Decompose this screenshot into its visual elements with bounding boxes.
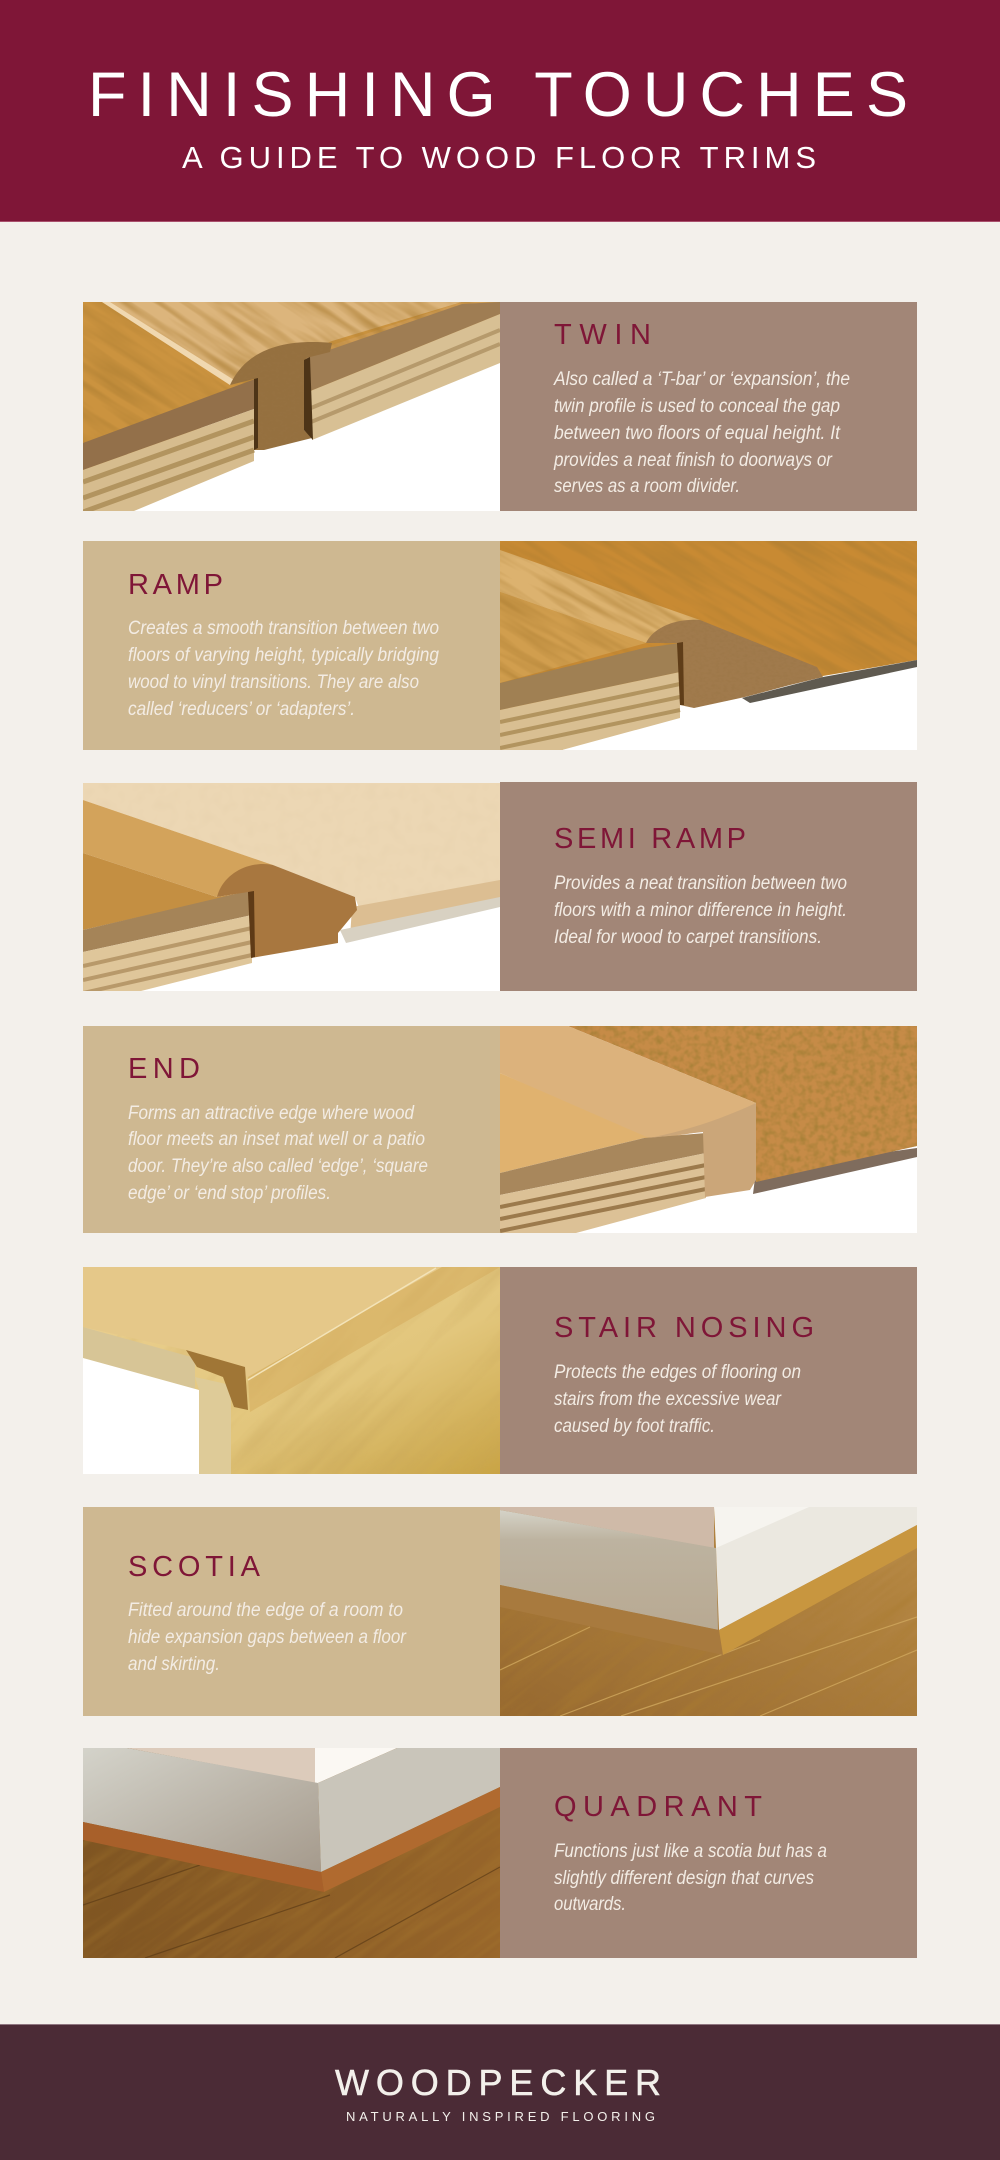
description: Functions just like a scotia but has a (554, 1841, 827, 1862)
panel: twin (83, 302, 917, 511)
description: stairs from the excessive wear (554, 1389, 782, 1410)
description: Protects the edges of flooring on (554, 1362, 801, 1383)
description (554, 1841, 827, 1915)
heading: SCOTIA (128, 1551, 261, 1583)
panel: end (83, 1026, 917, 1233)
description: slightly different design that curves (554, 1868, 814, 1889)
panel: ramp (83, 541, 917, 750)
brand name: WOODPECKER (335, 2062, 661, 2103)
photo: stair nosing (83, 1267, 500, 1474)
description: outwards. (554, 1894, 626, 1915)
description: caused by foot traffic. (554, 1416, 715, 1437)
photo: semi ramp trim (83, 783, 500, 993)
photo: scotia (500, 1507, 917, 1716)
description: Also called a ‘T-bar’ or ‘expansion’, the (553, 369, 850, 390)
description: twin profile is used to conceal the gap (554, 396, 840, 417)
description: between two floors of equal height. It (554, 423, 841, 444)
heading: RAMP (128, 569, 223, 601)
description: and skirting. (128, 1654, 220, 1675)
description: Ideal for wood to carpet transitions. (554, 927, 822, 948)
header banner (0, 0, 1000, 222)
description: provides a neat finish to doorways or (553, 450, 833, 471)
description (128, 1103, 428, 1204)
description: wood to vinyl transitions. They are also (128, 672, 419, 693)
description: floors with a minor difference in height. (554, 900, 847, 921)
photo: ramp trim (500, 541, 917, 750)
description: Fitted around the edge of a room to (128, 1600, 403, 1621)
heading: SEMI RAMP (554, 823, 746, 855)
tagline: NATURALLY INSPIRED FLOORING (346, 2109, 655, 2124)
description: called ‘reducers’ or ‘adapters’. (128, 699, 355, 720)
description (554, 1362, 801, 1437)
description: Forms an attractive edge where wood (128, 1103, 415, 1124)
description: hide expansion gaps between a floor (128, 1627, 407, 1648)
description: serves as a room divider. (554, 476, 740, 497)
description: floor meets an inset mat well or a patio (128, 1129, 425, 1150)
description: edge’ or ‘end stop’ profiles. (128, 1183, 331, 1204)
description (554, 873, 847, 948)
subtitle: A GUIDE TO WOOD FLOOR TRIMS (182, 140, 816, 175)
description: floors of varying height, typically bridging (128, 645, 439, 666)
heading: END (128, 1053, 200, 1085)
panel: semi ramp (83, 782, 917, 993)
photo: end trim (500, 1026, 917, 1233)
footer (0, 2024, 1000, 2160)
heading: STAIR NOSING (554, 1312, 814, 1344)
panel: scotia (83, 1507, 917, 1716)
photo: twin trim (83, 302, 500, 511)
description (128, 618, 439, 720)
heading: QUADRANT (554, 1791, 762, 1823)
title: FINISHING TOUCHES (88, 60, 908, 130)
description: Provides a neat transition between two (554, 873, 847, 894)
panel: stair nosing (83, 1267, 917, 1474)
description: door. They’re also called ‘edge’, ‘square (128, 1156, 428, 1177)
heading: TWIN (554, 319, 651, 351)
description (553, 369, 850, 497)
panel: quadrant (83, 1748, 917, 1958)
description (128, 1600, 407, 1675)
description: Creates a smooth transition between two (128, 618, 439, 639)
photo: quadrant (83, 1748, 500, 1958)
